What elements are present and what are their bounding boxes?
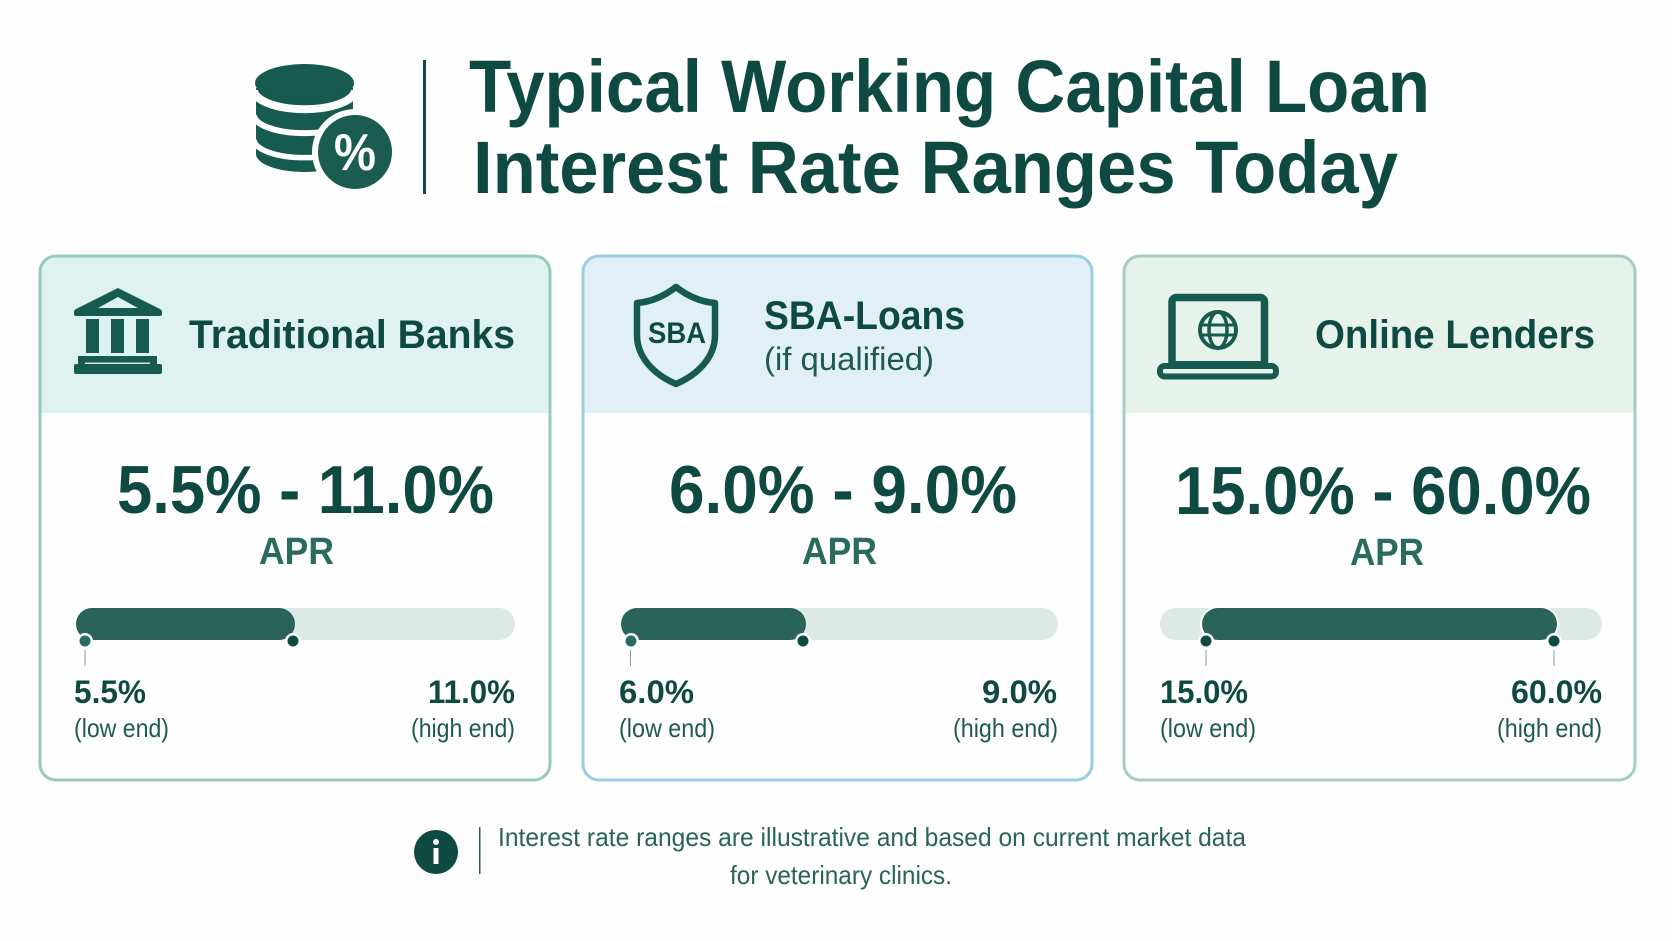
high end value: 60.0%: [1511, 674, 1602, 710]
low end caption: (low end): [619, 713, 715, 743]
heading: SBA-loans: SBA-Loans: [764, 294, 965, 338]
card header band: [40, 256, 550, 413]
card background: [1124, 256, 1635, 780]
range bar: [1160, 606, 1602, 666]
card background: [40, 256, 550, 780]
card border: [583, 256, 1092, 780]
icon: SBA shield: [637, 287, 715, 384]
icon: SBA shield: SBA: [648, 317, 706, 350]
icon: coin stack with percent badge: [254, 64, 398, 195]
rate range: 15.0% - 60.0%: [1175, 453, 1591, 529]
card border: [1124, 256, 1635, 780]
panel: SBA loans: [583, 256, 1092, 780]
title: Typical Working Capital Loan: [469, 45, 1430, 128]
icon: info: [414, 830, 458, 874]
title divider: [423, 60, 426, 194]
icon: bank building: [74, 288, 162, 374]
icon: coin stack with percent badge: %: [334, 124, 376, 182]
low end value: 5.5%: [74, 674, 146, 710]
title: [469, 45, 1430, 209]
card header band: [583, 256, 1092, 413]
rate range: 6.0% - 9.0%: [669, 452, 1017, 528]
card border: [40, 256, 550, 780]
high end caption: (high end): [953, 713, 1058, 743]
range bar: [76, 608, 515, 666]
footnote text: Interest rate ranges are illustrative and based on current market data: [498, 822, 1247, 852]
footnote text: for veterinary clinics.: [730, 860, 952, 890]
sub-heading: if qualified: (if qualified): [764, 341, 934, 377]
icon: laptop with globe: [1160, 298, 1276, 376]
APR label: APR: [802, 531, 877, 573]
APR label: APR: [259, 531, 334, 573]
low end value: 15.0%: [1160, 674, 1248, 710]
panel: traditional banks: [40, 256, 550, 780]
APR label: APR: [1350, 532, 1424, 574]
low end caption: (low end): [1160, 713, 1256, 743]
rate range: 5.5% - 11.0%: [117, 452, 494, 528]
card background: [583, 256, 1092, 780]
high end caption: (high end): [1497, 713, 1602, 743]
footnote text: [498, 822, 1247, 890]
low end caption: (low end): [74, 713, 169, 743]
high end value: 9.0%: [982, 674, 1057, 710]
heading: traditional banks: Traditional Banks: [189, 313, 515, 357]
high end value: 11.0%: [428, 674, 515, 710]
range bar: [621, 608, 1058, 666]
title: Interest Rate Ranges Today: [473, 126, 1398, 209]
high end caption: (high end): [411, 713, 515, 743]
heading: online lenders: Online Lenders: [1315, 313, 1595, 357]
low end value: 6.0%: [619, 674, 694, 710]
footnote divider: [479, 827, 480, 874]
card header band: [1124, 256, 1635, 413]
panel: online lenders: [1124, 256, 1635, 780]
